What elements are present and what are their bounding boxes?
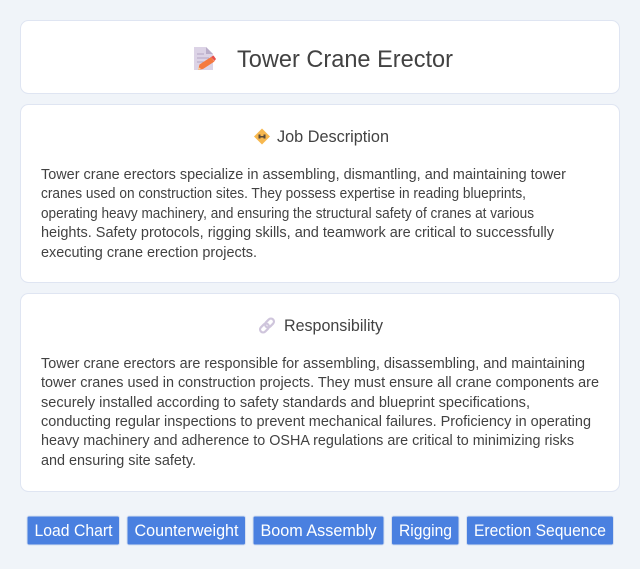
text block: job description body: operating heavy machinery, and ensuring the structural safety of cranes at various	[41, 206, 534, 222]
tags row	[27, 516, 614, 545]
tag: Load Chart: Load Chart	[34, 522, 113, 540]
tag: Boom Assembly	[253, 516, 384, 545]
tag: Erection Sequence: Erection Sequence	[474, 522, 606, 540]
tag: Rigging: Rigging	[399, 522, 452, 540]
tag: Boom Assembly: Boom Assembly	[260, 522, 377, 540]
text block: responsibility body: Tower crane erectors are responsible for assembling, disassembling, and maintaining	[41, 356, 585, 372]
text block: responsibility body: heavy machinery and adherence to OSHA regulations are critical to minimizing risks	[41, 433, 574, 449]
text block: responsibility body	[41, 356, 599, 469]
text block: job description body: cranes used on construction sites. They possess expertise in reading blueprints,	[41, 186, 526, 202]
icon: document with pencil	[194, 47, 216, 70]
heading: Tower Crane Erector: Tower Crane Erector	[237, 46, 453, 73]
heading: Responsibility: Responsibility	[284, 317, 384, 335]
text block: job description body: heights. Safety protocols, rigging skills, and teamwork are critical to successfully	[41, 225, 555, 241]
text block: job description body: executing crane erection projects.	[41, 245, 257, 261]
icon: construction sign	[254, 128, 270, 144]
text block: responsibility body: and ensuring site safety.	[41, 453, 196, 469]
text block: responsibility body: tower cranes used in construction projects. They must ensure all crane components are	[41, 375, 599, 391]
text block: job description body	[41, 167, 566, 261]
icon: chain link	[259, 317, 275, 334]
tag: Load Chart	[27, 516, 120, 545]
text block: job description body: Tower crane erectors specialize in assembling, dismantling, and maintaining tower	[41, 167, 566, 183]
tag: Counterweight: Counterweight	[134, 522, 239, 540]
tag: Erection Sequence	[466, 516, 614, 545]
panel: responsibility	[20, 294, 620, 492]
tag: Rigging	[392, 516, 459, 545]
heading: Job Description: Job Description	[277, 128, 389, 146]
panel: title	[20, 20, 620, 94]
text block: responsibility body: conducting regular inspections to prevent mechanical failures. Proficiency in operating	[41, 414, 591, 430]
panel: job description	[20, 104, 620, 282]
text block: responsibility body: securely installed according to safety standards and blueprint specifications,	[41, 395, 530, 411]
tag: Counterweight	[127, 516, 246, 545]
